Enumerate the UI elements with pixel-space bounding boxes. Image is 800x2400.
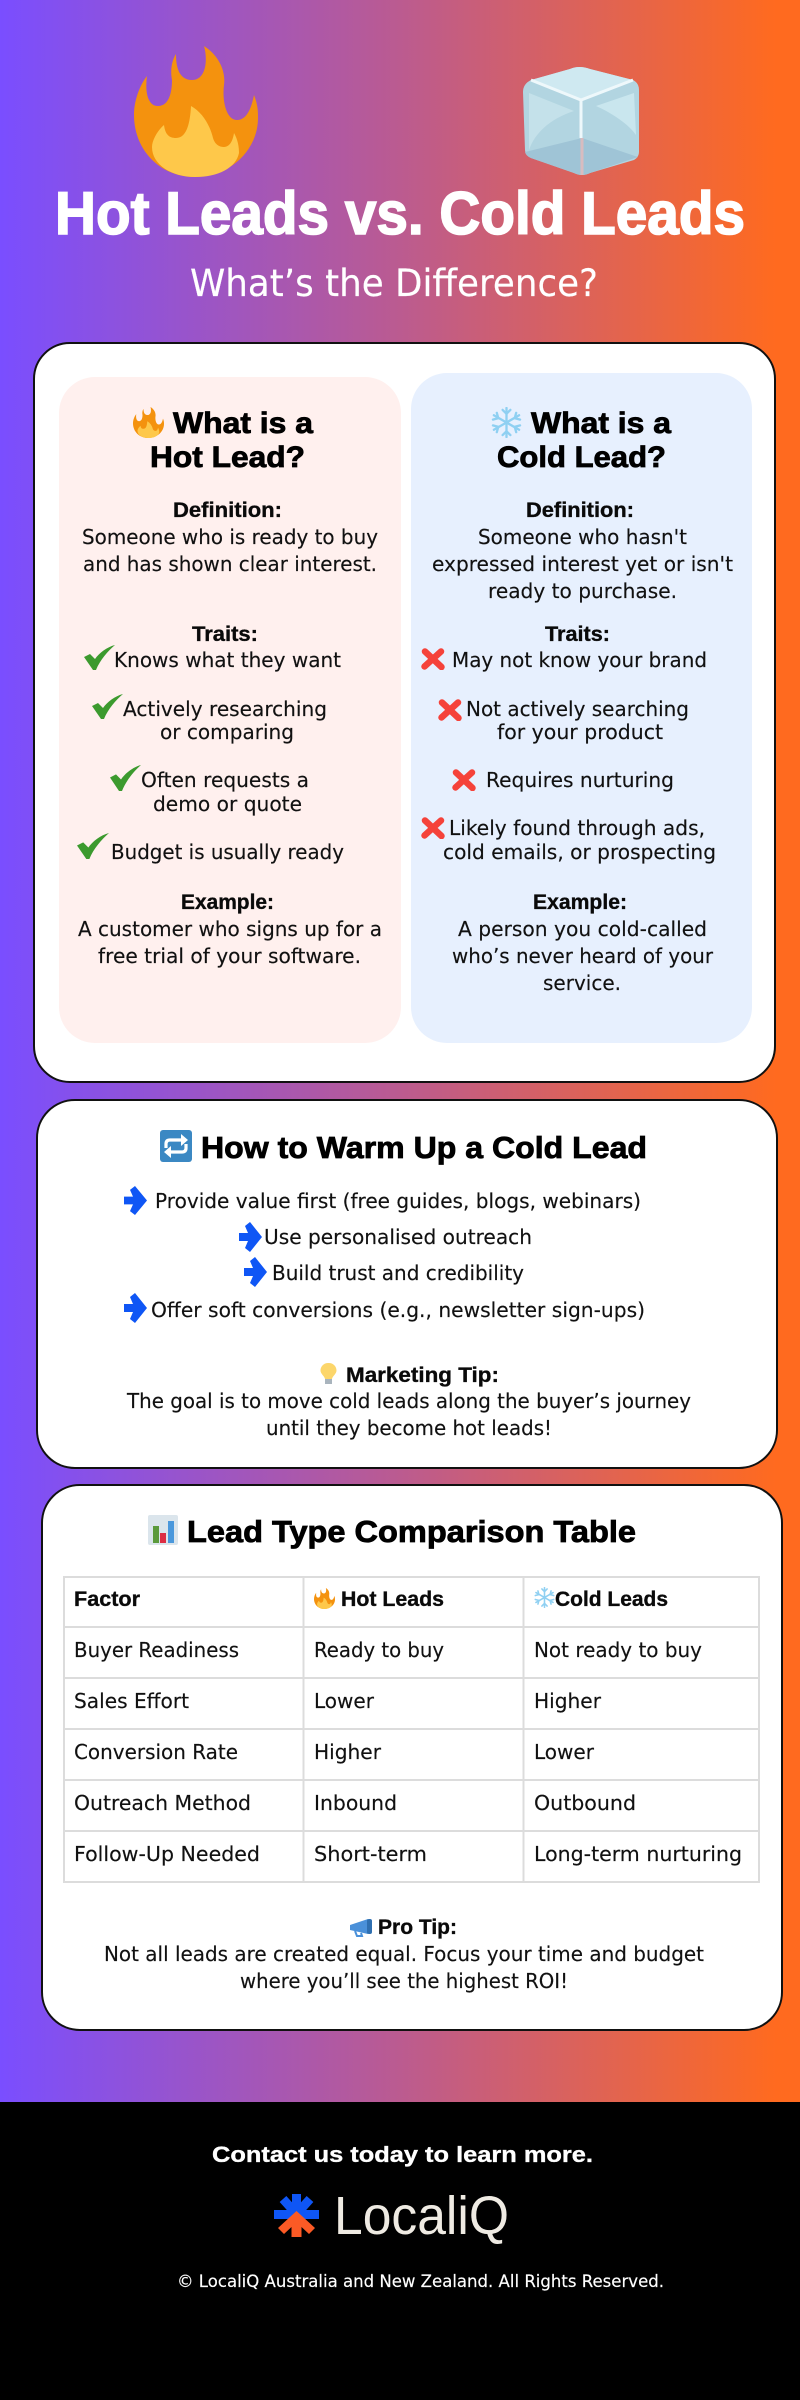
warm up steps: Provide value first (free guides, blogs, webinars) (155, 1189, 641, 1213)
table header (74, 1587, 668, 1611)
cold lead definition: Someone who hasn't (478, 525, 687, 549)
table header: Hot Leads (341, 1587, 444, 1611)
panel: definitions card (34, 343, 775, 1082)
heading: how to warm up: How to Warm Up a Cold Lead (201, 1130, 647, 1165)
cold lead traits: cold emails, or prospecting (443, 840, 716, 864)
cold lead traits: May not know your brand (452, 648, 707, 672)
row: buyer readiness: Buyer Readiness (74, 1638, 239, 1662)
row: sales effort: Lower (314, 1689, 375, 1713)
table header: Cold Leads (555, 1587, 668, 1611)
icon: small flame (133, 407, 164, 438)
pro tip: Not all leads are created equal. Focus your time and budget (104, 1942, 704, 1966)
hot lead definition: Someone who is ready to buy (82, 525, 378, 549)
hot lead example: Example: (181, 890, 274, 914)
panel: hot lead (59, 377, 401, 1043)
icon: ice cube (523, 67, 639, 175)
cold lead traits: Requires nurturing (486, 768, 674, 792)
subtitle: What’s the Difference? (190, 262, 598, 305)
heading: hot lead: Hot Lead? (150, 441, 305, 474)
cold lead definition (432, 498, 733, 603)
row: follow-up needed: Long-term nurturing (534, 1842, 742, 1866)
row: buyer readiness: Not ready to buy (534, 1638, 702, 1662)
row: outreach method (74, 1791, 636, 1815)
cold lead example (452, 890, 714, 995)
row: buyer readiness (74, 1638, 702, 1662)
hot lead traits: Traits: (192, 622, 258, 646)
warm up steps: Use personalised outreach (264, 1225, 532, 1249)
heading: cold lead (497, 407, 671, 474)
hot lead definition (82, 498, 378, 576)
call to action: Contact us today to learn more. (212, 2142, 593, 2167)
icon: repeat (160, 1130, 192, 1162)
hot lead example: A customer who signs up for a (78, 917, 382, 941)
row: conversion rate: Conversion Rate (74, 1740, 238, 1764)
marketing tip: until they become hot leads! (266, 1416, 552, 1440)
LocaliQ logo: LocaliQ (334, 2186, 509, 2246)
cold lead traits (424, 622, 716, 864)
icon: megaphone (350, 1919, 372, 1936)
warm up steps (124, 1186, 645, 1323)
cold lead example: A person you cold-called (458, 917, 707, 941)
panel: how to warm up a cold lead (37, 1100, 777, 1468)
panel: lead type comparison table (42, 1485, 782, 2030)
icon: bar chart (148, 1515, 178, 1545)
cold lead definition: Definition: (526, 498, 634, 522)
table header: Factor (74, 1587, 141, 1611)
warm up steps: Offer soft conversions (e.g., newsletter sign-ups) (151, 1298, 645, 1322)
heading: hot lead (150, 407, 313, 474)
marketing tip: Marketing Tip: (346, 1363, 499, 1387)
copyright: © LocaliQ Australia and New Zealand. All Rights Reserved. (177, 2272, 664, 2292)
heading: cold lead: Cold Lead? (497, 441, 666, 474)
row: outreach method: Outbound (534, 1791, 636, 1815)
row: conversion rate (74, 1740, 595, 1764)
icon: flame (134, 46, 258, 177)
row: buyer readiness: Ready to buy (314, 1638, 444, 1662)
comparison table (64, 1577, 759, 1882)
row: follow-up needed: Short-term (314, 1842, 427, 1866)
row: outreach method: Inbound (314, 1791, 397, 1815)
cold lead example: who’s never heard of your (452, 944, 714, 968)
hot lead traits: or comparing (160, 720, 294, 744)
icon: snowflake (493, 408, 520, 437)
hot lead traits: demo or quote (153, 792, 302, 816)
cold lead example: service. (543, 971, 621, 995)
cold lead definition: ready to purchase. (488, 579, 677, 603)
title: Hot Leads vs. Cold Leads (55, 180, 745, 247)
cold lead traits: for your product (497, 720, 663, 744)
row: outreach method: Outreach Method (74, 1791, 251, 1815)
hot lead example: free trial of your software. (98, 944, 361, 968)
footer (0, 2102, 800, 2400)
row: conversion rate: Higher (314, 1740, 382, 1764)
row: conversion rate: Lower (534, 1740, 595, 1764)
hot lead traits: Knows what they want (114, 648, 341, 672)
panel: cold lead (411, 373, 752, 1043)
cold lead traits: Not actively searching (466, 697, 689, 721)
pro tip: where you’ll see the highest ROI! (240, 1969, 568, 1993)
pro tip: Pro Tip: (378, 1915, 457, 1939)
row: follow-up needed: Follow-Up Needed (74, 1842, 260, 1866)
row: sales effort (74, 1689, 602, 1713)
heading: comparison table: Lead Type Comparison Table (187, 1514, 636, 1549)
row: sales effort: Higher (534, 1689, 602, 1713)
row: sales effort: Sales Effort (74, 1689, 189, 1713)
hot lead traits: Often requests a (141, 768, 309, 792)
table grid (64, 1577, 759, 1882)
warm up steps: Build trust and credibility (272, 1261, 524, 1285)
hot lead traits: Budget is usually ready (111, 840, 344, 864)
pro tip (104, 1915, 704, 1993)
marketing tip (126, 1363, 691, 1440)
hot lead traits (77, 622, 344, 864)
heading: cold lead: What is a (531, 407, 671, 440)
hot lead definition: Definition: (173, 498, 282, 522)
heading: hot lead: What is a (173, 407, 313, 440)
marketing tip: The goal is to move cold leads along the buyer’s journey (126, 1389, 691, 1413)
cold lead traits: Likely found through ads, (449, 816, 705, 840)
hot lead example (78, 890, 382, 968)
cold lead example: Example: (533, 890, 627, 914)
cold lead traits: Traits: (545, 622, 610, 646)
hot lead traits: Actively researching (123, 697, 327, 721)
cold lead definition: expressed interest yet or isn't (432, 552, 733, 576)
icon: light bulb (320, 1363, 336, 1384)
hot lead definition: and has shown clear interest. (83, 552, 377, 576)
row: follow-up needed (74, 1842, 742, 1866)
